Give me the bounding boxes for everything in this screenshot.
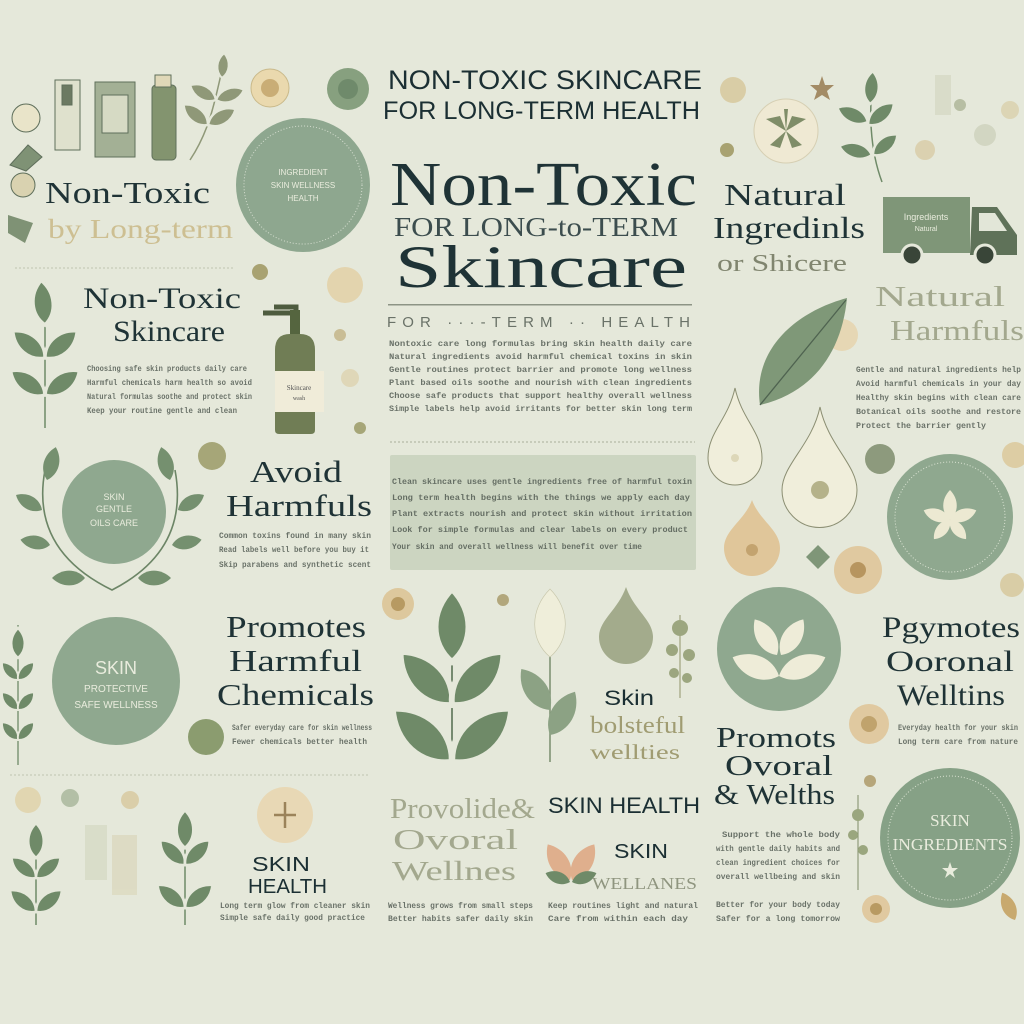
heading: skin health: HEALTH (248, 876, 327, 898)
heading: skin health (220, 854, 370, 923)
main title: FOR LONG-TERM HEALTH (383, 97, 700, 125)
badge: skin: PROTECTIVE (84, 684, 148, 695)
badge: right flower seal (887, 454, 1013, 580)
heading: skin health centre: Keep routines light and natural (548, 901, 698, 911)
icon: delivery truck (883, 197, 1017, 265)
text block: avoid: Read labels well before you buy it (219, 545, 369, 555)
central paragraph: Gentle routines protect barrier and promote long wellness (389, 365, 692, 375)
icon: pump bottle (263, 307, 324, 434)
heading: skin health centre: SKIN (614, 841, 668, 863)
heading: avoid harmfuls: Harmfuls (226, 488, 372, 523)
badge: skin (52, 617, 180, 745)
icon: small floral top centre (382, 588, 509, 620)
central heading (388, 151, 697, 306)
text block left: Keep your routine gentle and clean (87, 406, 237, 416)
panel: central banner: Long term health begins with the things we apply each day (392, 493, 690, 503)
badge: top-left seal: SKIN WELLNESS (271, 181, 335, 190)
main title (383, 65, 702, 125)
icon: faded bottle cluster (15, 787, 139, 895)
icon: small herb (666, 615, 695, 698)
badge: skin ingredients: SKIN (930, 811, 970, 830)
icon: right florals (806, 442, 1024, 597)
icon: large leaf (759, 298, 847, 405)
heading: avoid harmfuls (226, 454, 372, 523)
panel: central banner: Look for simple formulas and clear labels on every product (392, 525, 688, 535)
icon: top-right leaf branch (834, 70, 902, 182)
heading: natural ingredients: Natural (724, 177, 846, 212)
text block: avoid (219, 531, 371, 570)
panel: central leaves (381, 589, 523, 775)
heading: non-toxic top-left (8, 175, 235, 268)
heading: promotes overall: Welltins (897, 679, 1005, 712)
heading: natural harmfuls (826, 282, 1024, 351)
top-left product icons (10, 75, 176, 197)
text block lower right: clean ingredient choices for (716, 858, 840, 868)
icon: olive drop (599, 587, 653, 664)
text block: promotes (10, 719, 372, 775)
panel: central banner: Plant extracts nourish and protect skin without irritation (392, 509, 692, 519)
heading: skin bolsters wellness (590, 687, 685, 764)
text block lower right (716, 830, 841, 924)
icon: bottom-left leaf sprigs (5, 810, 218, 925)
text block lower right: overall wellbeing and skin (716, 872, 840, 882)
heading: natural harmfuls: Harmfuls (890, 316, 1024, 347)
panel: central banner (390, 455, 696, 570)
icon: right small seal (849, 704, 889, 787)
main title: NON-TOXIC SKINCARE (388, 65, 702, 95)
central heading: Skincare (395, 234, 687, 300)
heading: promotes overall wellness: & Welths (714, 780, 835, 811)
badge: top-left seal (236, 118, 370, 252)
badge: skin: SAFE WELLNESS (74, 700, 158, 711)
heading: skin health centre (548, 793, 700, 924)
heading: provides overall wellness: Better habits safer daily skin (388, 914, 533, 924)
central paragraph: Simple labels help avoid irritants for better skin long term (389, 404, 692, 414)
badge: leaf circle (717, 587, 841, 711)
heading: promotes harmful chemicals: Chemicals (217, 677, 374, 712)
heading: non-toxic top-left: Non-Toxic (45, 175, 210, 210)
heading: non-toxic skincare: Skincare (113, 315, 225, 348)
heading: promotes overall wellness: Ovoral (725, 751, 833, 782)
icon: white flower stem (512, 589, 585, 762)
icon: left scattered florals (198, 264, 366, 470)
central subheading: FOR ···-TERM ·· HEALTH (387, 314, 690, 331)
icon: wreath with seal (13, 445, 207, 590)
heading: natural ingredients (713, 177, 865, 277)
heading: promotes overall (882, 611, 1020, 747)
central paragraph: Nontoxic care long formulas bring skin health daily care (389, 339, 692, 349)
text block lower right: Support the whole body (722, 830, 840, 840)
text block left: Natural formulas soothe and protect skin (87, 392, 252, 402)
heading: provides overall wellness: Wellnes (392, 856, 516, 886)
icon: top-right seal and star (720, 76, 834, 163)
panel: central banner: Your skin and overall wellness will benefit over time (392, 542, 642, 552)
text block: avoid: Common toxins found in many skin (219, 531, 371, 541)
icon: pump bottle: wash (293, 396, 305, 402)
heading: non-toxic skincare (83, 282, 241, 348)
central heading: Non-Toxic (390, 151, 697, 219)
text block lower right: Better for your body today (716, 900, 840, 910)
central heading: FOR LONG-to-TERM (394, 212, 678, 242)
heading: promotes overall wellness: Promots (716, 723, 836, 754)
icon: small top seals (251, 68, 369, 110)
heading: skin health: SKIN (252, 854, 310, 876)
text block left (87, 364, 252, 416)
heading: non-toxic top-left: by Long-term (48, 214, 233, 244)
heading: skin bolsters wellness: Skin (604, 687, 654, 710)
central paragraph: Choose safe products that support healthy overall wellness (389, 391, 692, 401)
heading: natural ingredients: or Shicere (717, 251, 847, 277)
icon: pump bottle: Skincare (287, 384, 311, 392)
icon: cross seal (257, 787, 313, 843)
heading: skin health: Long term glow from cleaner skin (220, 901, 370, 911)
icon: delivery truck: Ingredients (904, 212, 949, 222)
heading: provides overall wellness: Wellness grows from small steps (388, 901, 533, 911)
icon: peach flower (540, 839, 602, 887)
text block left: Choosing safe skin products daily care (87, 364, 247, 374)
text block: promotes: Safer everyday care for skin wellness (232, 723, 372, 733)
text block right (856, 365, 1021, 431)
heading: provides overall wellness: Provolide& (390, 793, 535, 825)
heading: promotes harmful chemicals: Promotes (226, 609, 366, 644)
heading: natural harmfuls: Natural (875, 282, 1005, 313)
heading: skin bolsters wellness: bolsteful (590, 713, 685, 739)
badge: skin ingredients: INGREDIENTS (892, 835, 1008, 854)
icon: top-right faded cluster (915, 75, 1019, 160)
heading: promotes overall wellness (714, 723, 836, 811)
panel: central banner: Clean skincare uses gentle ingredients free of harmful toxin (392, 477, 692, 487)
icon: wreath with seal: OILS CARE (90, 518, 138, 528)
central paragraph: Plant based oils soothe and nourish with clean ingredients (389, 378, 692, 388)
text block left: Harmful chemicals harm health so avoid (87, 378, 252, 388)
central paragraph (389, 339, 695, 442)
icon: delivery truck: Natural (915, 226, 938, 233)
heading: promotes harmful chemicals (217, 609, 374, 712)
central paragraph: Natural ingredients avoid harmful chemical toxins in skin (389, 352, 692, 362)
icon: cream drops (708, 388, 857, 576)
text block: promotes: Fewer chemicals better health (232, 737, 367, 747)
icon: leaf branch left (5, 279, 85, 428)
badge: top-left seal: INGREDIENT (278, 168, 328, 177)
heading: natural ingredients: Ingredinls (713, 210, 865, 245)
text block lower right: with gentle daily habits and (716, 844, 840, 854)
text block right: Botanical oils soothe and restore (856, 407, 1021, 417)
heading: non-toxic skincare: Non-Toxic (83, 282, 241, 315)
text block: avoid: Skip parabens and synthetic scent (219, 560, 371, 570)
heading: avoid harmfuls: Avoid (250, 454, 343, 489)
heading: skin health centre: SKIN HEALTH (548, 793, 700, 818)
icon: right sprig and seal (848, 795, 1021, 923)
heading: promotes harmful chemicals: Harmful (229, 643, 362, 678)
icon: wreath with seal: GENTLE (96, 504, 132, 514)
heading: skin health centre: WELLANES (592, 874, 697, 893)
icon: top herb sprig (179, 53, 246, 160)
icon: wreath with seal: SKIN (103, 492, 125, 502)
heading: skin bolsters wellness: wellties (590, 740, 680, 764)
icon: skin branch left (0, 625, 38, 765)
heading: provides overall wellness: Ovoral (393, 824, 518, 856)
heading: skin health centre: Care from within each day (548, 914, 688, 924)
badge: top-left seal: HEALTH (288, 194, 319, 203)
text block right: Protect the barrier gently (856, 421, 986, 431)
heading: promotes overall: Ooronal (886, 645, 1014, 678)
heading: promotes overall: Pgymotes (882, 611, 1020, 644)
badge: skin ingredients (880, 768, 1020, 908)
text block lower right: Safer for a long tomorrow (716, 914, 841, 924)
badge: skin: SKIN (95, 658, 137, 678)
heading: provides overall wellness (388, 793, 535, 924)
heading: skin health: Simple safe daily good practice (220, 913, 365, 923)
